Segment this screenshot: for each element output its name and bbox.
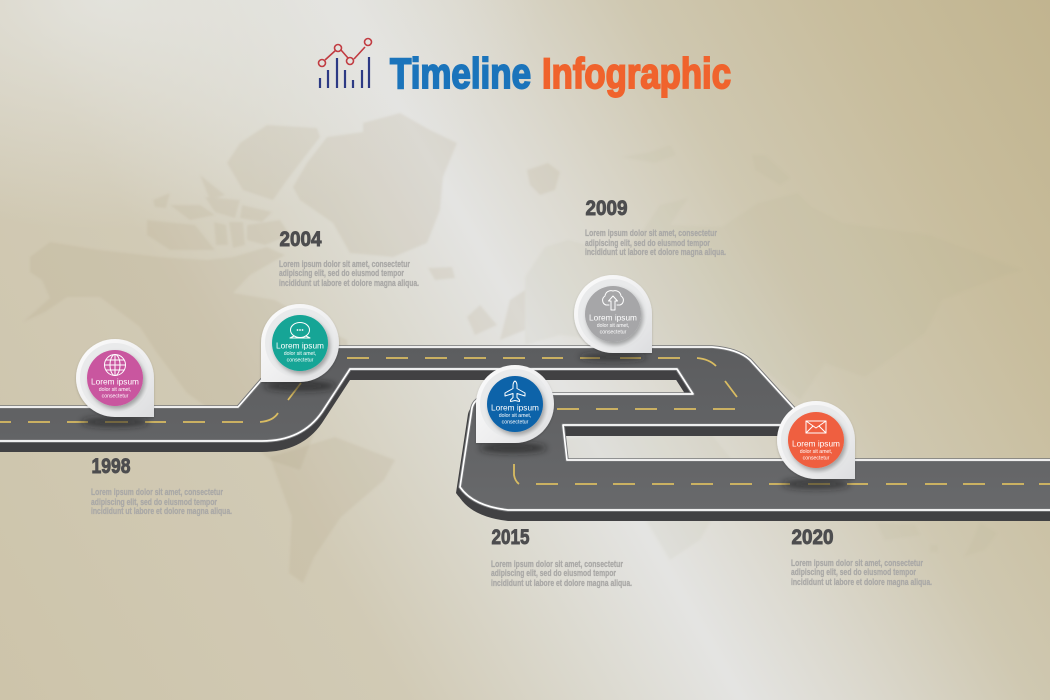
text block: 2004 (279, 228, 419, 289)
road centre dashes (0, 358, 1050, 484)
americas and greenland (23, 113, 560, 583)
icon: cloud upload (603, 291, 623, 310)
text block: 1998 (91, 455, 232, 517)
text block: 1998: incididunt ut labore et dolore magna aliqua. (91, 506, 232, 517)
text block: 2020: Lorem ipsum dolor sit amet, consectetur (791, 558, 923, 569)
road (0, 347, 1050, 521)
pin: 2004: Lorem ipsum (276, 340, 324, 350)
text block: 2020: 2020 (792, 526, 834, 549)
icon: chat bubbles (290, 322, 310, 338)
text block: 2004: 2004 (280, 228, 322, 251)
pin: 2009: dolor sit amet, (597, 323, 629, 329)
text block: 2015: incididunt ut labore et dolore magna aliqua. (491, 578, 632, 589)
pin: 1998: consectetur (102, 394, 129, 400)
text block: 2004: Lorem ipsum dolor sit amet, consectetur (279, 259, 410, 270)
heading: Timeline Infographic: Timeline (390, 50, 531, 98)
pin: 2015: consectetur (502, 420, 529, 426)
text block: 1998: 1998 (92, 455, 131, 478)
pin: 2015: dolor sit amet, (499, 413, 531, 419)
text block: 2015: adipiscing elit, sed do eiusmod tempor (491, 568, 616, 579)
text block: 2020 (791, 526, 932, 588)
heading: Timeline Infographic (390, 50, 731, 98)
pin: 1998: dolor sit amet, (99, 387, 131, 393)
pin: 1998: Lorem ipsum (91, 376, 139, 386)
text block: 2004: incididunt ut labore et dolore magna aliqua. (279, 278, 419, 289)
pin: 2015 (476, 365, 554, 453)
pin: 1998 (76, 339, 154, 427)
pin: 2020: Lorem ipsum (792, 438, 840, 448)
pin: 2020 (777, 401, 855, 489)
pin: 2020: consectetur (803, 456, 830, 462)
title (318, 38, 731, 98)
icon: globe (104, 354, 126, 376)
text block: 2004: adipiscing elit, sed do eiusmod tempor (279, 268, 404, 279)
text block: 2009: Lorem ipsum dolor sit amet, consectetur (585, 228, 717, 239)
text block: 2009 (585, 197, 726, 258)
world map (23, 113, 1022, 583)
text block: 1998: Lorem ipsum dolor sit amet, consectetur (91, 487, 223, 498)
heading: Timeline Infographic: Infographic (542, 50, 731, 98)
pin: 2004: consectetur (287, 358, 314, 364)
icon: envelope (806, 421, 826, 433)
pin: 2009 (574, 275, 652, 361)
pin: 2009: consectetur (600, 330, 627, 336)
text block: 2020: adipiscing elit, sed do eiusmod tempor (791, 567, 916, 578)
text block: 1998: adipiscing elit, sed do eiusmod tempor (91, 497, 217, 508)
text block: 2009: incididunt ut labore et dolore magna aliqua. (585, 247, 726, 258)
icon: airplane (505, 381, 525, 402)
pin: 2020: dolor sit amet, (800, 449, 832, 455)
eurasia and australia (525, 145, 1022, 560)
text block: 2015: 2015 (492, 526, 530, 549)
pin: 2004 (261, 304, 339, 391)
text block: 2009: adipiscing elit, sed do eiusmod tempor (585, 238, 710, 249)
pin: 2004: dolor sit amet, (284, 351, 316, 357)
text block: 2020: incididunt ut labore et dolore magna aliqua. (791, 577, 932, 588)
pin: 2015: Lorem ipsum (491, 402, 539, 412)
text block: 2015: Lorem ipsum dolor sit amet, consectetur (491, 559, 623, 570)
text block: 2015 (491, 526, 632, 589)
icon: line and bar chart (318, 38, 372, 88)
text block: 2009: 2009 (586, 197, 628, 220)
pin: 2009: Lorem ipsum (589, 312, 637, 322)
